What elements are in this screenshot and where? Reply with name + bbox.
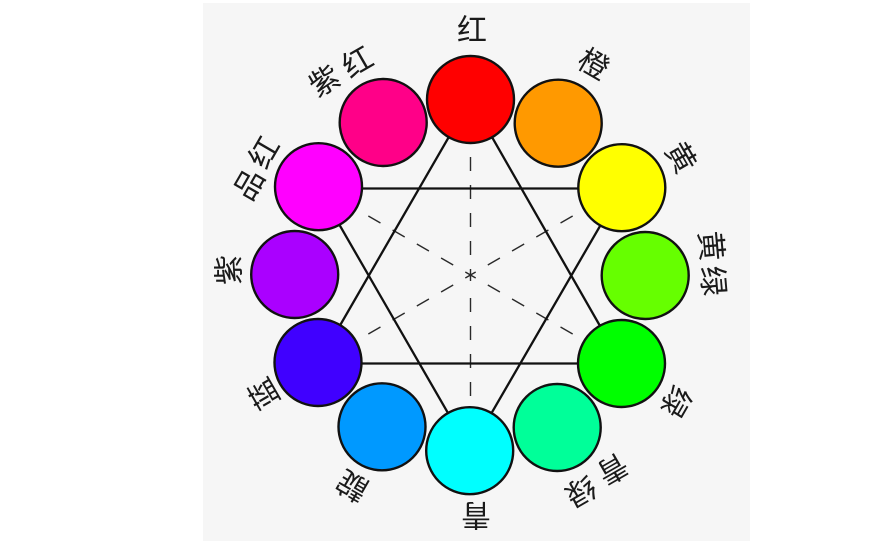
- dashed axes with center mark: [368, 156, 574, 400]
- label: yellow-green: [692, 230, 730, 297]
- background panel: [203, 3, 750, 541]
- circle: yellow-green: [602, 232, 689, 319]
- label: yellow-green: 黄: [692, 230, 728, 262]
- label: magenta: 红: [243, 132, 287, 174]
- label: red: 红: [457, 14, 487, 48]
- label: teal green: 绿: [559, 468, 601, 512]
- label: rose: 红: [337, 41, 379, 85]
- circle: azure: [338, 383, 426, 470]
- circle: orange: [515, 80, 602, 167]
- triangle: cyan, magenta, yellow: [318, 188, 622, 451]
- circle: magenta: [275, 143, 362, 230]
- label: magenta: 品: [228, 164, 272, 206]
- label: orange: 橙: [572, 43, 614, 87]
- label: rose: [304, 41, 379, 104]
- label: rose: 紫: [304, 60, 346, 104]
- circle: yellow: [578, 144, 665, 231]
- circle: rose: [340, 79, 427, 166]
- circle: purple: [251, 231, 338, 318]
- label: azure: 靛: [332, 463, 374, 507]
- color circles: [251, 56, 689, 494]
- label: yellow-green: 绿: [694, 265, 730, 297]
- labels: [214, 14, 730, 530]
- label: cyan: 青: [461, 498, 491, 530]
- label: green: 绿: [653, 380, 697, 422]
- label: yellow: 黄: [658, 137, 702, 179]
- circle: red: [427, 56, 514, 143]
- label: magenta: [228, 132, 287, 206]
- triangle: red, green, indigo: [318, 100, 622, 364]
- label: teal green: [559, 446, 633, 512]
- circle: cyan: [426, 407, 513, 494]
- label: teal green: 青: [591, 446, 633, 490]
- label: indigo: 蓝: [243, 372, 287, 414]
- circle: green: [578, 320, 665, 407]
- label: purple: 紫: [214, 255, 246, 285]
- circle: indigo: [274, 319, 362, 406]
- circle: teal green: [514, 384, 601, 471]
